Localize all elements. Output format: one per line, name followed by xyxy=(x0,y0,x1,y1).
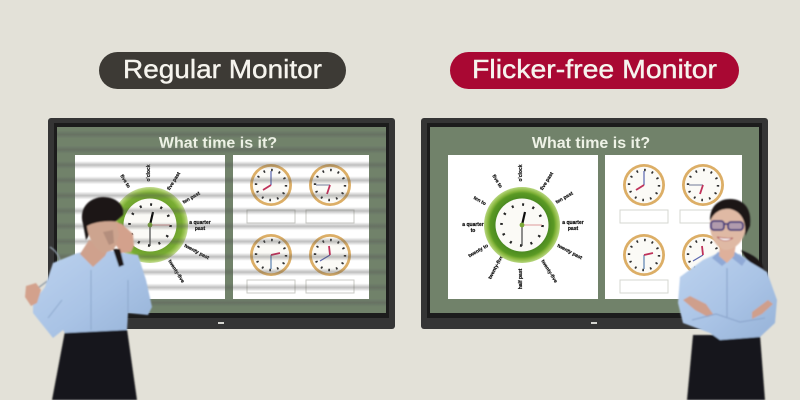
face xyxy=(87,221,120,253)
dark hair lock on shoulder xyxy=(113,249,124,267)
figure: smiling woman xyxy=(678,199,777,400)
minute labels around clock xyxy=(118,164,211,284)
panel: regular monitor xyxy=(48,118,395,329)
minute labels around clock: to xyxy=(471,228,475,234)
shirt folds and buttons xyxy=(48,270,128,330)
shirt xyxy=(678,254,777,340)
heading: What time is it?: What time is it? xyxy=(532,135,650,152)
small clock 3 xyxy=(250,234,292,276)
collar xyxy=(712,252,746,266)
minute labels around clock: twenty past xyxy=(556,243,583,261)
hair xyxy=(82,197,123,240)
heading: Regular Monitor xyxy=(99,52,346,89)
monitor screen xyxy=(57,127,386,313)
minute labels around clock: five to xyxy=(118,174,131,189)
neck xyxy=(719,244,736,263)
minute labels around clock: twenty-five xyxy=(166,259,185,284)
glasses xyxy=(711,221,743,230)
ponytail xyxy=(741,250,763,279)
minute labels around clock xyxy=(462,164,584,289)
minute labels around clock: twenty-five xyxy=(539,259,558,284)
hair xyxy=(710,199,750,236)
monitor logo xyxy=(591,322,597,324)
small clock 1 xyxy=(250,164,292,206)
glasses in hand xyxy=(38,247,62,288)
answer boxes xyxy=(247,210,354,293)
minute labels around clock: ten past xyxy=(182,191,202,206)
worksheet left panel xyxy=(448,155,598,299)
shirt xyxy=(33,249,152,338)
flicker stripes xyxy=(57,127,386,313)
figure: tired woman xyxy=(25,197,152,400)
monitor screen xyxy=(430,127,759,313)
heading: What time is it?: What time is it? xyxy=(159,135,277,152)
minute labels around clock: half past xyxy=(518,268,524,289)
neck and chest xyxy=(80,240,110,267)
skirt xyxy=(687,335,765,400)
minute labels around clock: a quarter xyxy=(562,220,584,226)
small clock 3 xyxy=(623,234,665,276)
heading: Flicker-free Monitor xyxy=(450,52,739,89)
minute labels around clock: twenty past xyxy=(183,243,210,261)
minute labels around clock: ten to xyxy=(472,195,487,207)
minute labels around clock: five past xyxy=(539,171,555,192)
large clock xyxy=(112,187,188,263)
minute labels around clock: past xyxy=(195,226,205,232)
small clock 1 xyxy=(623,164,665,206)
large clock xyxy=(484,187,560,263)
minute labels around clock: a quarter xyxy=(462,222,484,228)
monitor frame xyxy=(421,118,768,329)
worksheet left panel xyxy=(75,155,225,299)
hand on forehead xyxy=(116,222,134,253)
sleeve fold xyxy=(692,268,765,322)
minute labels around clock: five to xyxy=(490,174,503,189)
answer boxes xyxy=(620,210,728,293)
minute labels around clock: a quarter xyxy=(189,220,211,226)
minute labels around clock: o'clock xyxy=(146,164,152,182)
left hand xyxy=(25,283,41,306)
minute labels around clock: twenty-five xyxy=(487,254,505,280)
heading: Flicker-free Monitor: Flicker-free Monitor xyxy=(472,54,717,84)
minute labels around clock: five past xyxy=(166,171,182,192)
small clock 2 xyxy=(682,164,724,206)
worksheet right panel xyxy=(605,155,742,299)
smile xyxy=(717,237,733,241)
small clock 4 xyxy=(682,234,724,276)
monitor frame xyxy=(48,118,395,329)
heading: Regular Monitor: Regular Monitor xyxy=(123,54,322,84)
minute labels around clock: ten past xyxy=(555,191,575,206)
right forearm xyxy=(752,300,773,319)
screen bezel xyxy=(427,123,762,318)
monitor logo xyxy=(218,322,224,324)
small clock 4 xyxy=(309,234,351,276)
panel: flicker-free monitor xyxy=(421,118,768,329)
minute labels around clock: past xyxy=(568,226,578,232)
left forearm xyxy=(683,296,713,317)
minute labels around clock: o'clock xyxy=(518,164,524,182)
small clock 2 xyxy=(309,164,351,206)
minute labels around clock: twenty to xyxy=(467,243,490,259)
brow shadow xyxy=(103,230,114,245)
screen bezel xyxy=(54,123,389,318)
skirt xyxy=(52,329,137,400)
face xyxy=(710,209,745,250)
worksheet right panel xyxy=(233,155,369,299)
